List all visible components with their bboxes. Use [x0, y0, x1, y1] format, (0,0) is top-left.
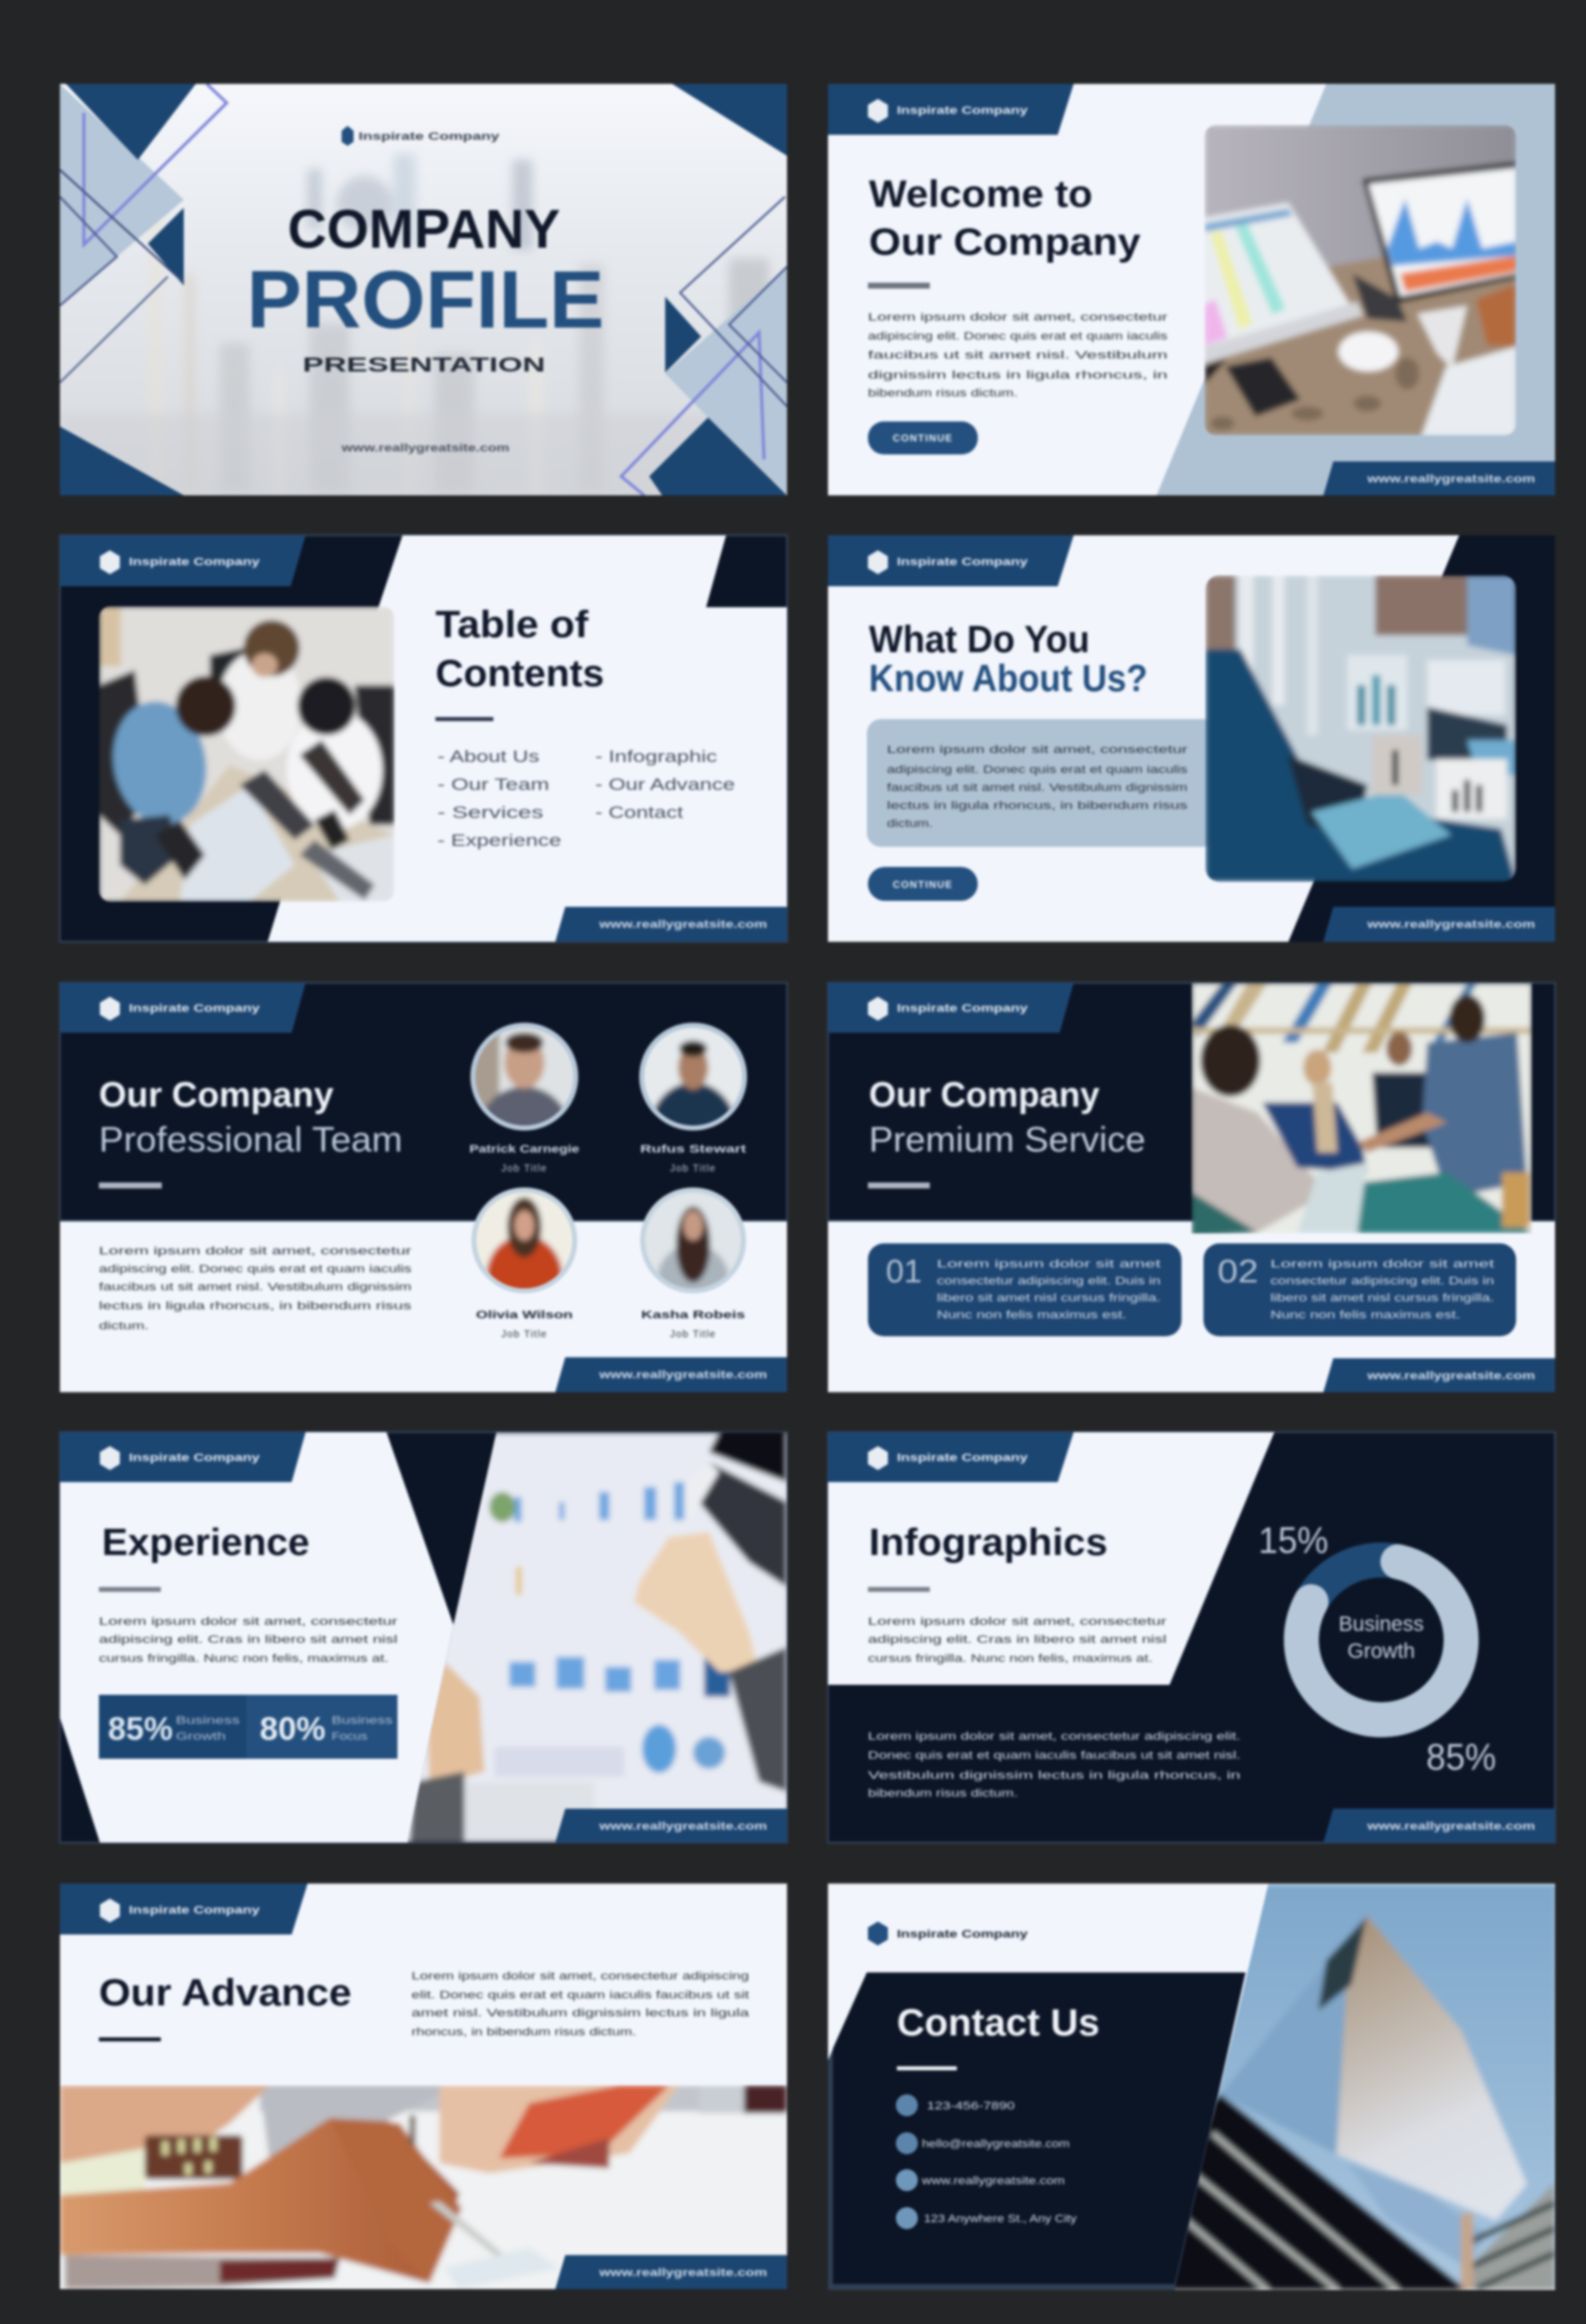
footer band	[1323, 1358, 1555, 1392]
body text: Lorem ipsum dolor sit amet, consectetur	[99, 1245, 412, 1257]
title	[247, 198, 604, 377]
stat 80 percent: 80%	[260, 1711, 326, 1747]
body text: adipiscing elit. Donec quis erat et quam iaculis	[99, 1263, 412, 1275]
footer band	[555, 1357, 787, 1392]
continue button	[868, 421, 978, 454]
footer band: www.reallygreatsite.com	[1366, 919, 1535, 931]
dark panel	[1288, 535, 1555, 942]
header band: Inspirate Company	[897, 1452, 1029, 1464]
header band	[60, 983, 306, 1033]
team member 4	[639, 1187, 749, 1340]
title: PROFILE	[247, 255, 604, 346]
team member 2: Rufus Stewart	[640, 1144, 746, 1156]
heading	[869, 174, 1141, 264]
body text: dictum.	[887, 818, 933, 830]
team member 2: Job Title	[670, 1163, 716, 1174]
dark top panel	[60, 983, 787, 1220]
footer band	[1323, 907, 1555, 942]
body text on dark: Lorem ipsum dolor sit amet, consectetur adipiscing elit.	[868, 1731, 1240, 1743]
body text: lectus in ligula rhoncus, in bibendum risus	[99, 1300, 412, 1312]
contact: address: 123 Anywhere St., Any City	[924, 2213, 1078, 2225]
body text: amet nisl. Vestibulum dignissim lectus in ligula	[411, 2007, 750, 2019]
service card 01: 01	[886, 1253, 922, 1289]
stat 85 percent	[108, 1711, 241, 1747]
contents list: - Services	[437, 803, 543, 822]
service card 02: Lorem ipsum dolor sit amet	[1270, 1258, 1494, 1270]
logo	[868, 1922, 1029, 1945]
footer band	[555, 907, 787, 942]
heading: Infographics	[869, 1522, 1108, 1564]
body text	[99, 1616, 398, 1665]
header band: Inspirate Company	[897, 1003, 1029, 1015]
body text on dark	[868, 1731, 1240, 1800]
service card 02: consectetur adipiscing elit. Duis in	[1270, 1275, 1494, 1287]
heading: Professional Team	[99, 1121, 402, 1160]
footer band: www.reallygreatsite.com	[1366, 1821, 1535, 1833]
header band	[60, 1884, 308, 1935]
contact: website	[896, 2169, 1065, 2191]
divider	[868, 283, 930, 289]
heading: Contents	[435, 653, 604, 695]
team member 1: Patrick Carnegie	[469, 1144, 579, 1156]
header band: Inspirate Company	[129, 1003, 261, 1015]
heading: Know About Us?	[869, 658, 1148, 700]
logo: Inspirate Company	[897, 1929, 1029, 1940]
dark background	[60, 1432, 787, 1843]
body text	[868, 312, 1169, 399]
body text: faucibus ut sit amet nisl. Vestibulum dignissim	[99, 1281, 411, 1293]
body text: elit. Donec quis erat et quam iaculis faucibus ut sit	[411, 1989, 749, 2001]
dark contact panel	[828, 1972, 1245, 2290]
heading: Our Company	[869, 222, 1141, 264]
header band	[60, 535, 306, 586]
heading: Table of	[435, 604, 588, 646]
slide 1: cover	[60, 84, 787, 498]
logo	[342, 126, 500, 146]
body text: Lorem ipsum dolor sit amet, consectetur	[887, 744, 1189, 756]
body text: Lorem ipsum dolor sit amet, consectetur	[868, 312, 1169, 324]
divider	[435, 717, 493, 721]
top-right corner triangle	[672, 84, 787, 156]
photo: business handshake	[1191, 983, 1532, 1237]
photo: paper charts and hands	[399, 1432, 789, 1843]
body text: dignissim lectus in ligula rhoncus, in	[868, 370, 1168, 382]
logo: Inspirate Company	[359, 131, 500, 143]
heading	[869, 619, 1148, 700]
donut center label: Business	[1338, 1613, 1424, 1636]
contact: website: www.reallygreatsite.com	[921, 2175, 1065, 2187]
contact: phone: 123-456-7890	[927, 2100, 1015, 2112]
contact: phone	[896, 2094, 1015, 2116]
slide 3: table of contents	[60, 535, 787, 942]
body text on light	[868, 1616, 1168, 1665]
donut center label	[1338, 1613, 1424, 1663]
contents list: - Infographic	[595, 747, 718, 766]
photo: team at table	[99, 606, 395, 902]
divider	[99, 1182, 162, 1188]
stat 85 percent: Business	[176, 1715, 241, 1727]
heading: Our Company	[99, 1076, 335, 1115]
divider	[99, 2037, 161, 2041]
slide 9: our advance	[60, 1884, 787, 2289]
slide 7: experience	[60, 1432, 789, 1843]
slide 8: infographics	[828, 1432, 1555, 1843]
stat 80 percent: Focus	[332, 1731, 369, 1743]
logo text: Inspirate Company	[897, 105, 1029, 117]
header band: Inspirate Company	[129, 1452, 261, 1464]
body text on light: adipiscing elit. Cras in libero sit amet nisl	[868, 1634, 1167, 1646]
heading: Contact Us	[897, 2002, 1100, 2044]
body text on dark: bibendum risus dictum.	[868, 1788, 1018, 1800]
heading: Premium Service	[869, 1121, 1146, 1160]
light panel	[60, 1432, 453, 1843]
logo icon	[868, 99, 888, 123]
body text on dark: Vestibulum dignissim lectus in ligula rhoncus, in	[868, 1770, 1240, 1782]
body text: rhoncus, in bibendum risus dictum.	[411, 2026, 636, 2038]
body text on light: cursus fringilla. Nunc non felis, maximus at.	[868, 1653, 1153, 1665]
team member 3: Olivia Wilson	[475, 1309, 573, 1321]
footer band: www.reallygreatsite.com	[598, 1369, 767, 1381]
light panel	[828, 1432, 1274, 1685]
body text: adipiscing elit. Donec quis erat et quam iaculis	[887, 764, 1189, 776]
body text: adipiscing elit. Donec quis erat et quam iaculis	[868, 331, 1169, 343]
footer band	[555, 2255, 787, 2289]
background	[828, 535, 1555, 942]
stats bar	[99, 1695, 397, 1759]
footer band: www.reallygreatsite.com	[1366, 1370, 1535, 1382]
light blue panel	[1157, 84, 1555, 495]
service card 02: 02	[1217, 1253, 1258, 1289]
team member 1: Job Title	[501, 1163, 547, 1174]
heading: Our Advance	[99, 1972, 352, 2014]
contents list: - About Us	[437, 747, 539, 766]
body text: faucibus ut sit amet nisl. Vestibulum dignissim	[887, 782, 1188, 794]
team member 4: Kasha Robeis	[641, 1309, 745, 1321]
contact: address	[896, 2207, 1078, 2229]
body text: Lorem ipsum dolor sit amet, consectetur adipiscing	[411, 1970, 749, 1982]
team member 3	[469, 1187, 579, 1340]
continue button: CONTINUE	[893, 433, 953, 444]
header band	[828, 535, 1074, 586]
header band: Inspirate Company	[129, 1905, 261, 1917]
body text	[411, 1970, 750, 2038]
header band	[828, 1432, 1074, 1482]
continue button	[868, 867, 978, 901]
light background	[828, 983, 1555, 1392]
background	[828, 84, 1555, 495]
team member 1	[469, 1023, 579, 1178]
team member 3: Job Title	[501, 1329, 547, 1340]
body text	[887, 744, 1189, 830]
background	[828, 1884, 1555, 2290]
stat 80 percent: Business	[332, 1715, 394, 1727]
service card 02	[1203, 1243, 1516, 1336]
header band	[828, 84, 1074, 135]
bottom-right shapes	[621, 197, 787, 495]
stat 85 percent: 85%	[108, 1711, 173, 1747]
heading	[99, 1076, 402, 1160]
body text	[99, 1245, 412, 1332]
contents list: - Our Team	[437, 775, 549, 794]
footer band: www.reallygreatsite.com	[598, 919, 767, 931]
service card 01	[868, 1243, 1182, 1336]
service card 01: libero sit amet nisl cursus fringilla.	[937, 1292, 1161, 1304]
contact: email	[896, 2132, 1070, 2154]
photo: hands writing	[60, 2085, 787, 2289]
slide 5: professional team	[60, 983, 787, 1392]
body text on light: Lorem ipsum dolor sit amet, consectetur	[868, 1616, 1168, 1628]
footer band: www.reallygreatsite.com	[598, 2267, 767, 2279]
donut center label: Growth	[1347, 1640, 1415, 1663]
body text: dictum.	[99, 1320, 149, 1332]
contents list: - Contact	[595, 803, 683, 822]
body text: cursus fringilla. Nunc non felis, maximus at.	[99, 1653, 389, 1665]
body text: faucibus ut sit amet nisl. Vestibulum	[868, 350, 1168, 362]
stat 85 percent: Growth	[176, 1731, 226, 1743]
bottom-left corner triangle	[60, 426, 184, 495]
divider	[99, 1587, 161, 1592]
top-left shapes	[60, 84, 227, 383]
photo: laptops on desk	[1204, 125, 1516, 436]
light panel	[268, 535, 787, 942]
heading	[869, 1076, 1146, 1160]
cover background city photo	[60, 84, 787, 498]
contents list: - Our Advance	[595, 775, 735, 794]
heading: Experience	[102, 1522, 310, 1564]
header band: Inspirate Company	[897, 556, 1029, 568]
continue button: CONTINUE	[893, 880, 953, 891]
photo: business charts and laptop	[1205, 575, 1516, 882]
body text on dark: Donec quis erat et quam iaculis faucibus ut sit amet nisl.	[868, 1750, 1240, 1762]
divider	[868, 1587, 930, 1592]
contents list: - Experience	[437, 831, 561, 850]
footer band: www.reallygreatsite.com	[598, 1821, 767, 1833]
divider	[897, 2066, 957, 2070]
body text: bibendum risus dictum.	[868, 387, 1018, 399]
service card 02: libero sit amet nisl cursus fringilla.	[1270, 1292, 1494, 1304]
title: PRESENTATION	[303, 355, 545, 377]
team member 2	[639, 1023, 749, 1182]
title: COMPANY	[288, 198, 560, 260]
divider	[868, 1182, 930, 1188]
85 percent label: 85%	[1426, 1737, 1496, 1778]
header band	[60, 1432, 306, 1482]
light background	[60, 983, 787, 1392]
15 percent label: 15%	[1258, 1520, 1328, 1561]
footer band	[1323, 1809, 1555, 1843]
footer band	[555, 1809, 787, 1843]
slide 4: what do you know	[828, 535, 1555, 942]
stat 80 percent	[260, 1711, 394, 1747]
dark top panel	[828, 983, 1555, 1220]
heading: What Do You	[869, 619, 1090, 661]
footer band	[1323, 461, 1555, 495]
heading: Our Company	[869, 1076, 1101, 1115]
slide 6: premium service	[828, 983, 1555, 1392]
body text: Lorem ipsum dolor sit amet, consectetur	[99, 1616, 398, 1628]
background	[60, 1884, 787, 2289]
header band: Inspirate Company	[129, 556, 261, 568]
donut chart	[1286, 1545, 1476, 1735]
body text: lectus in ligula rhoncus, in bibendum risus	[887, 800, 1189, 812]
service card 02: Nunc non felis maximus est.	[1270, 1309, 1460, 1321]
team member 4: Job Title	[670, 1329, 716, 1340]
dark background	[60, 535, 787, 942]
heading	[435, 604, 604, 695]
body text: adipiscing elit. Cras in libero sit amet nisl	[99, 1634, 397, 1646]
header band	[828, 983, 1074, 1033]
contact: email: hello@reallygreatsite.com	[922, 2138, 1070, 2150]
contents list	[437, 747, 735, 850]
service card 01: consectetur adipiscing elit. Duis in	[937, 1275, 1161, 1287]
service card 01: Lorem ipsum dolor sit amet	[937, 1258, 1161, 1270]
website: www.reallygreatsite.com	[341, 442, 509, 454]
photo: skyscraper	[1168, 1884, 1557, 2290]
dark background	[828, 1432, 1555, 1843]
footer band: www.reallygreatsite.com	[1366, 473, 1535, 485]
heading: Welcome to	[869, 174, 1093, 216]
grey text box	[867, 719, 1216, 847]
slide 2: welcome	[828, 84, 1555, 495]
service card 01: Nunc non felis maximus est.	[937, 1309, 1127, 1321]
slide 10: contact us	[828, 1884, 1557, 2290]
